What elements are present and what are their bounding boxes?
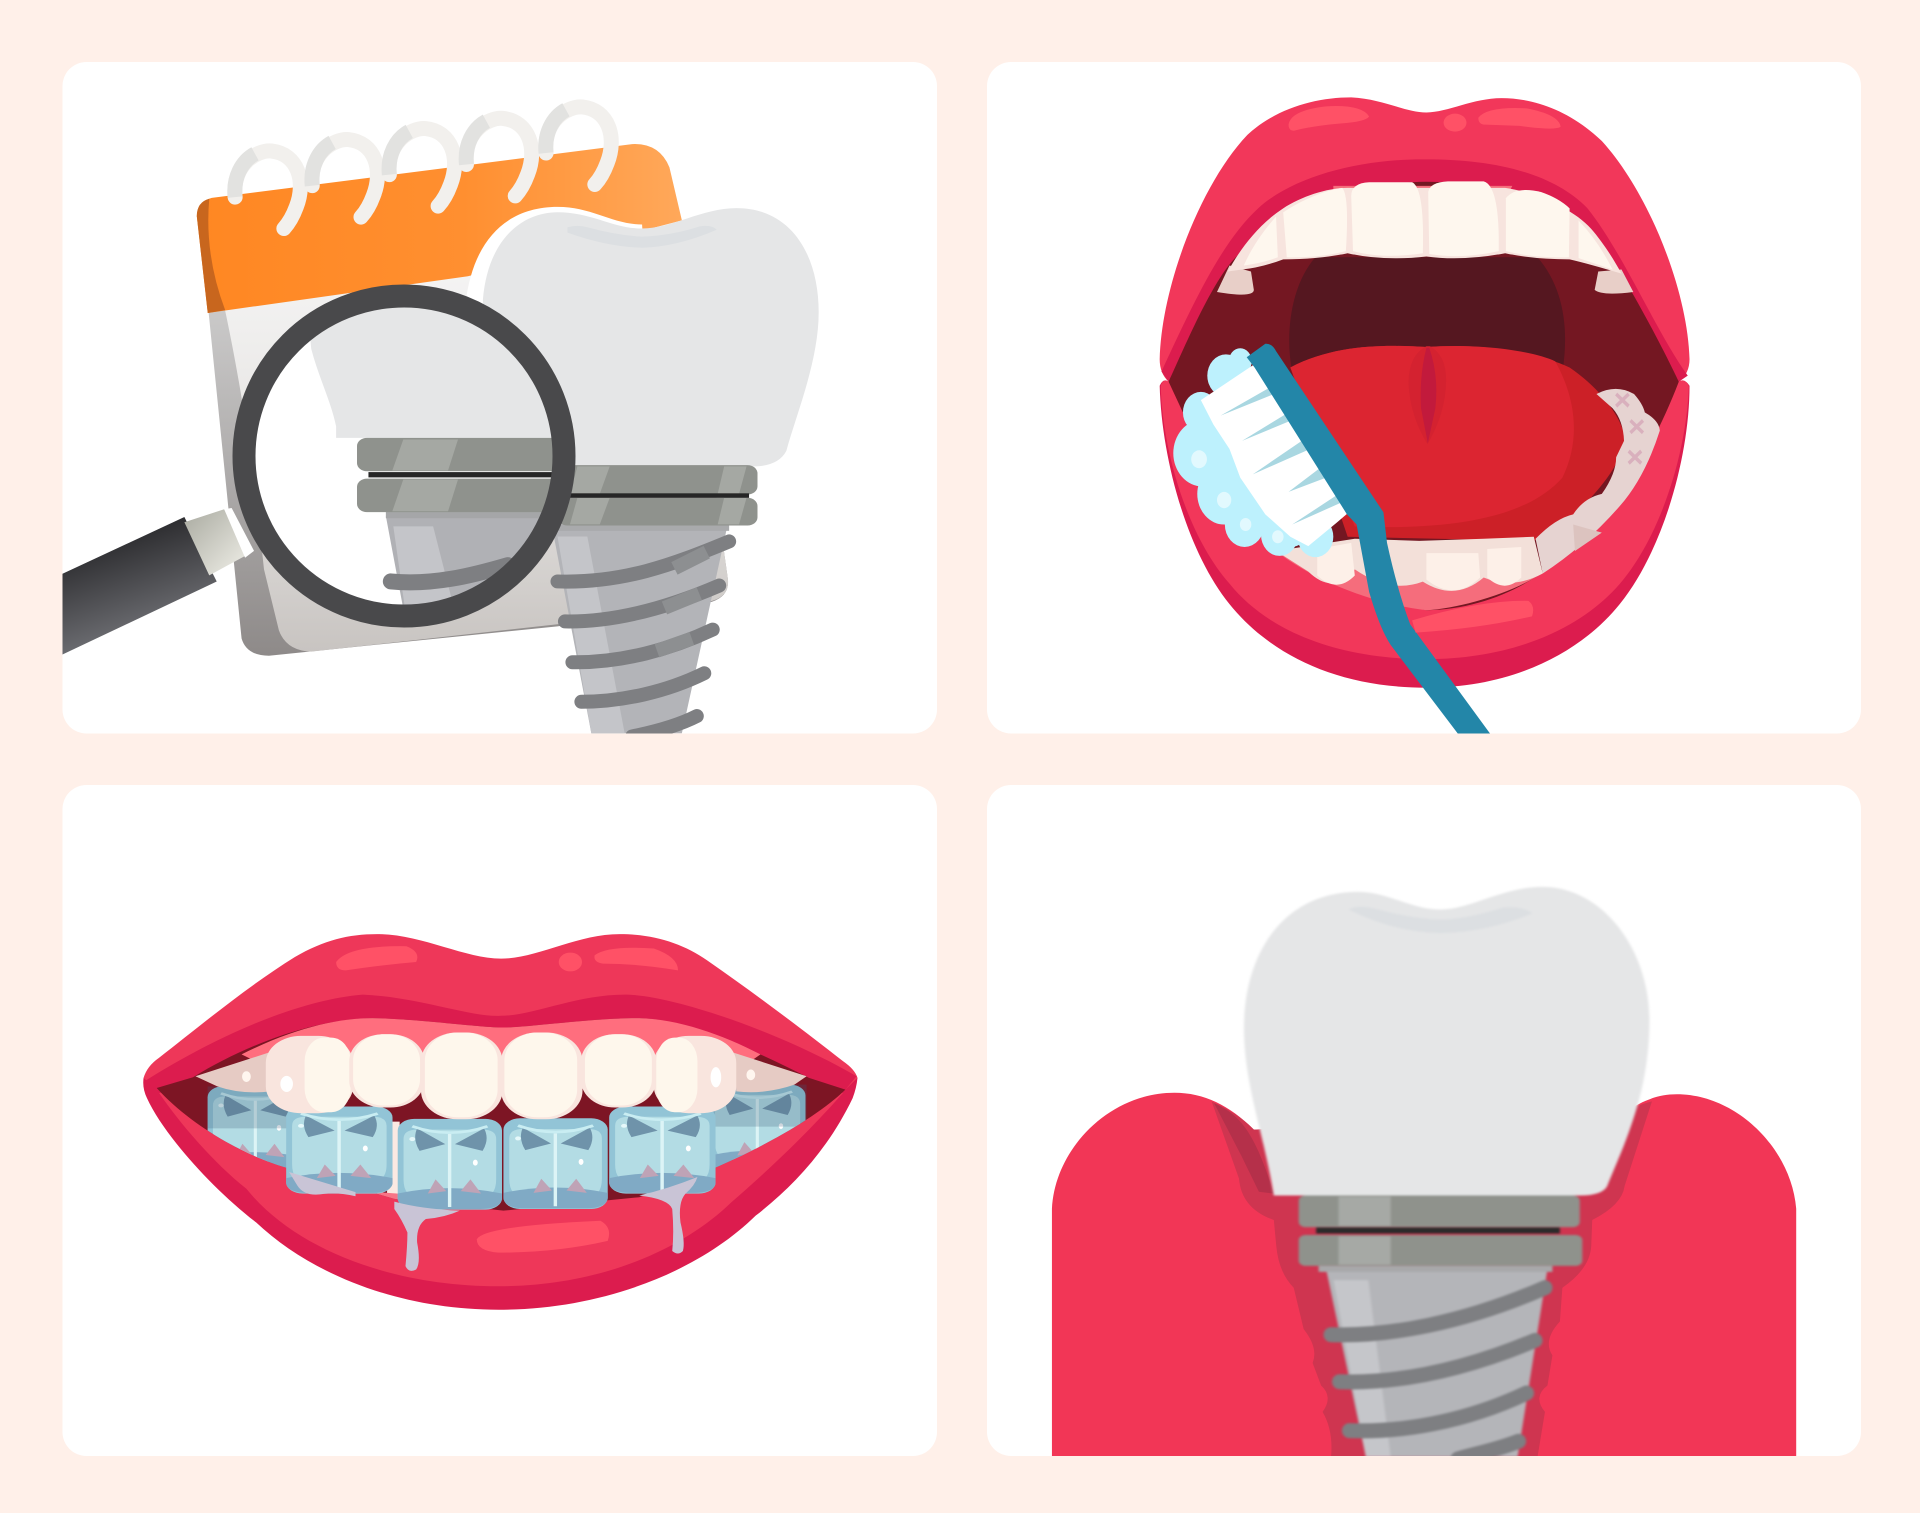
panel card: checkups — [62, 62, 937, 734]
toothbrush handle — [1247, 344, 1491, 735]
upper teeth — [266, 1033, 736, 1119]
magnifier lens background — [256, 341, 552, 604]
lower back teeth — [1536, 389, 1660, 573]
panel card: implant in gum — [987, 785, 1861, 1456]
socket shadow — [1212, 1101, 1652, 1457]
panel: brushing teeth in open mouth — [987, 62, 1861, 735]
mouth cavity — [1169, 182, 1679, 610]
magnifier ring — [244, 296, 564, 616]
back tooth highlights — [242, 1070, 755, 1082]
upper lip — [1160, 97, 1690, 382]
throat — [1289, 257, 1565, 372]
toothbrush bristles — [1201, 364, 1351, 546]
panel: implant set in gum — [987, 785, 1861, 1459]
abutment — [1299, 1195, 1582, 1272]
panel card: cold foods — [62, 785, 937, 1456]
illustration: implant and gum — [1052, 887, 1796, 1459]
lower lip highlight — [1412, 601, 1533, 633]
magnifier handle — [60, 508, 254, 656]
mouth interior — [157, 1018, 845, 1211]
screw threads — [1331, 1288, 1545, 1459]
upper teeth — [1228, 181, 1622, 274]
side ice cubes — [208, 1085, 807, 1201]
screw body — [1326, 1269, 1547, 1457]
panel card: brushing — [987, 62, 1861, 734]
gum — [1052, 1093, 1796, 1457]
lips — [143, 934, 857, 1310]
panel: checkup calendar and implant — [60, 62, 937, 736]
implant crown and screw — [465, 207, 819, 736]
illustration: calendar, implant and magnifier — [60, 107, 819, 736]
panel: ice on teeth in smiling mouth — [62, 785, 937, 1456]
lower gum — [1276, 551, 1545, 610]
far upper molars — [1217, 265, 1633, 295]
magnified implant inside lens — [310, 308, 552, 604]
toothpaste foam — [1173, 348, 1333, 557]
melting water drips — [289, 1172, 697, 1271]
upper gum — [1333, 186, 1512, 189]
front ice cubes — [286, 1106, 716, 1210]
crown crease — [1354, 908, 1528, 932]
tongue — [1290, 346, 1625, 541]
screw highlight — [1334, 1280, 1391, 1457]
blurred crown and implant — [1244, 887, 1649, 1459]
crown — [1244, 887, 1649, 1195]
illustration: open mouth and toothbrush — [1160, 97, 1690, 735]
illustration: smiling lips with ice cubes — [143, 934, 857, 1310]
lower lip — [1160, 380, 1690, 688]
upper gum — [242, 1018, 761, 1071]
back teeth — [195, 1053, 807, 1092]
lower front teeth — [1276, 537, 1543, 591]
calendar — [197, 107, 728, 656]
